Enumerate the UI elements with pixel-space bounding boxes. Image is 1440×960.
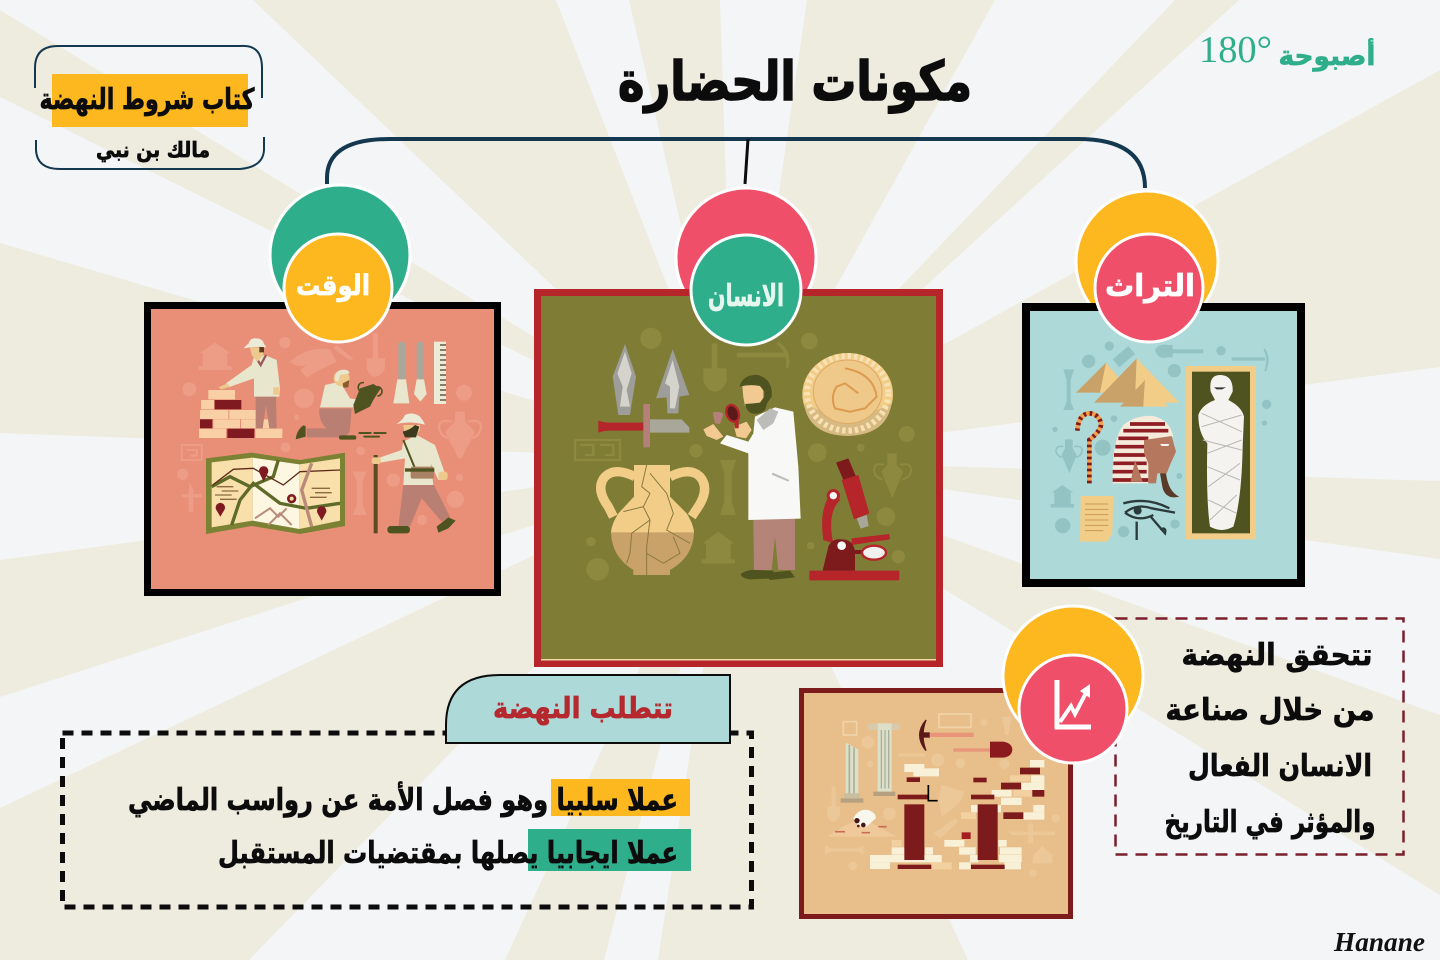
panel: ruins bbox=[802, 690, 1070, 916]
columns bbox=[846, 743, 858, 793]
crook bbox=[1077, 413, 1101, 483]
arrowheads bbox=[613, 344, 636, 415]
dashed box: conclusion: والمؤثر في التاريخ bbox=[1164, 805, 1376, 840]
badge inner: heritage: التراث bbox=[1105, 269, 1195, 304]
dashed box: conclusion: الانسان الفعال bbox=[1188, 749, 1372, 784]
person 2 bbox=[307, 408, 352, 437]
dashed box: conclusion: من خلال صناعة bbox=[1166, 693, 1374, 728]
mummy bbox=[1186, 366, 1256, 539]
book reference box: مالك بن نبي bbox=[96, 138, 210, 162]
badge: growth outer circle bbox=[1003, 606, 1143, 746]
title: مكونات الحضارة bbox=[618, 50, 972, 113]
badge inner: heritage bbox=[1095, 234, 1203, 342]
badge inner: time: الوقت bbox=[296, 269, 370, 302]
brand label: أصبوحة bbox=[1278, 38, 1376, 72]
illustration: pyramids, pharaoh, mummy bbox=[1051, 341, 1271, 542]
scroll bbox=[1080, 496, 1113, 542]
pharaoh bbox=[1113, 416, 1173, 483]
connector bracket bbox=[327, 139, 1145, 188]
brand label bbox=[1199, 29, 1376, 72]
microscope bbox=[809, 571, 899, 580]
panel: human (scientist) bbox=[538, 292, 940, 664]
person 1 bbox=[256, 397, 277, 428]
badge outer: time bbox=[270, 185, 410, 325]
panel: time (explorers) bbox=[148, 306, 498, 592]
sword bbox=[598, 421, 645, 433]
signature: Hanane bbox=[1333, 927, 1425, 957]
skull mound bbox=[828, 818, 897, 837]
map bbox=[206, 453, 345, 534]
hiker bbox=[374, 455, 378, 533]
tab: renaissance requires: تتطلب النهضة bbox=[493, 691, 673, 725]
badge inner: time bbox=[284, 234, 392, 342]
dashed box: conclusion: تتحقق النهضة bbox=[1182, 638, 1372, 673]
vase bbox=[601, 472, 635, 517]
badge outer: human bbox=[676, 188, 816, 328]
panel: heritage (Egypt) bbox=[1026, 307, 1301, 583]
illustration: scientist, vase, coin, microscope bbox=[575, 328, 915, 581]
pyramids bbox=[1076, 363, 1118, 393]
scientist bbox=[753, 518, 795, 570]
bricks bbox=[870, 760, 1044, 869]
book reference box: كتاب شروط النهضة bbox=[40, 82, 255, 116]
tools bbox=[398, 342, 405, 380]
illustration: ruined columns and bricks bbox=[825, 714, 1060, 877]
dashed box: requirements: عملا ايجابيا يصلها بمقتضيات المستقبل bbox=[218, 836, 678, 871]
badge: growth chart icon bbox=[1019, 655, 1127, 763]
dashed box: requirements: عملا سلبيا وهو فصل الأمة عن رواسب الماضي bbox=[128, 781, 678, 818]
badge inner: human bbox=[691, 235, 801, 345]
eye of Horus bbox=[1123, 501, 1175, 540]
bricks bbox=[199, 390, 282, 438]
book reference box bbox=[35, 46, 264, 169]
dashed box: requirements bbox=[62, 733, 752, 907]
brand label: 180° bbox=[1199, 29, 1272, 71]
dashed box: conclusion bbox=[1116, 618, 1404, 854]
dark bricks and pillars bbox=[898, 768, 1044, 869]
coin bbox=[802, 353, 893, 436]
pick and shovel bbox=[920, 720, 926, 751]
tab: renaissance requires bbox=[446, 675, 730, 743]
badge inner: human: الانسان bbox=[708, 279, 784, 314]
badge outer: heritage bbox=[1076, 191, 1218, 333]
illustration: archaeologists and map bbox=[177, 333, 481, 534]
